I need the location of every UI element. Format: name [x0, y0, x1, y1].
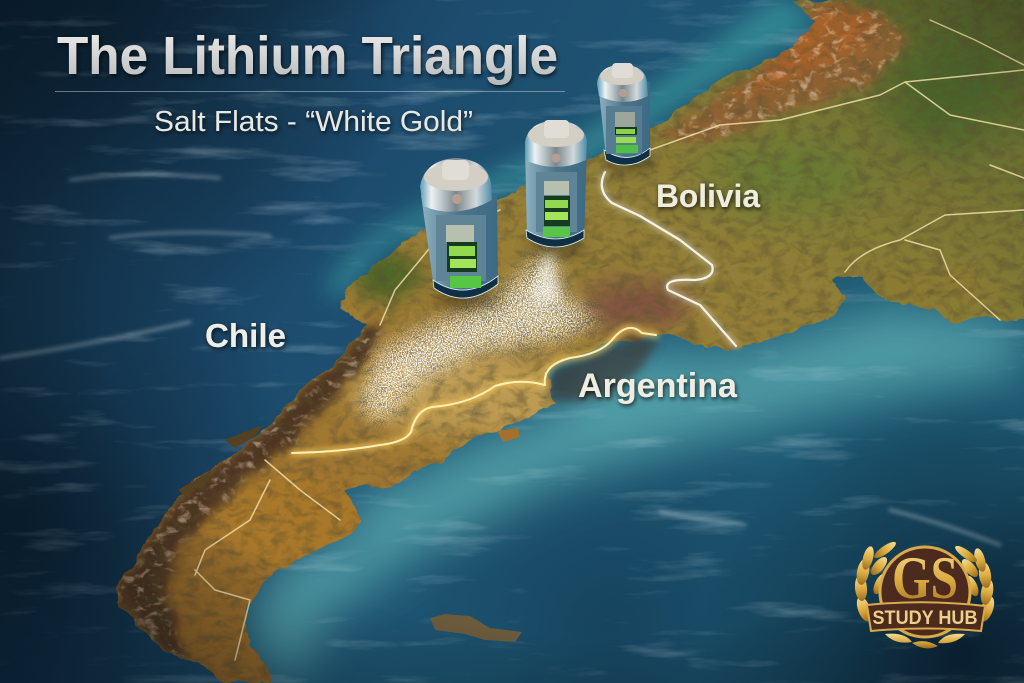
dark shadow near Argentina label [548, 335, 660, 402]
logo: GS Study Hub [854, 539, 997, 648]
minor borders [195, 20, 1024, 660]
subtitle: Salt Flats - “White Gold” [154, 106, 473, 138]
laurel wreath [854, 539, 997, 623]
border lines [195, 20, 1024, 660]
medallion [880, 547, 970, 637]
Bolivia border [602, 172, 736, 346]
golden plain [350, 355, 590, 435]
battery 2: centre [525, 120, 587, 256]
title divider [55, 91, 565, 92]
label: Bolivia: Bolivia [656, 178, 760, 214]
green northern lowlands [880, 30, 1020, 150]
battery 1: front left [420, 158, 502, 309]
dark rocky west coast [115, 320, 385, 683]
label: Argentina: Argentina [578, 367, 738, 405]
glowing gold border [292, 328, 656, 453]
reddish basin [580, 281, 690, 329]
GS letters: GS [892, 545, 958, 611]
orange-brown mountain chain [655, 0, 910, 145]
islands [178, 425, 522, 642]
banner: STUDY HUB [872, 608, 978, 629]
salt flats: white speckled deposit [360, 252, 600, 420]
battery 3: top right [597, 63, 656, 172]
banner [867, 602, 985, 631]
land edge fill behind displaced map [830, 0, 1024, 318]
bottom laurel [885, 634, 965, 648]
title: The Lithium Triangle [57, 26, 558, 86]
label: Chile: Chile [205, 317, 286, 354]
